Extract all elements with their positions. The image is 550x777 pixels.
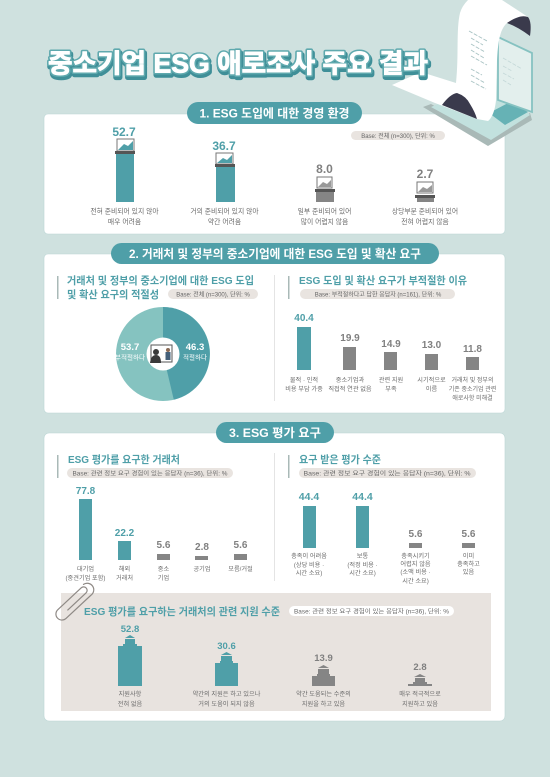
bar: 36.7: 약간 어려움 xyxy=(208,217,241,226)
bar chart: required level: 시간 소요) xyxy=(349,569,376,577)
bar: 13.9: 13.9 xyxy=(314,653,333,664)
bar chart: reasons: 40.4 xyxy=(294,313,314,324)
base note: support level xyxy=(289,606,454,616)
bar chart: requesting partners xyxy=(66,486,253,582)
bar: 30.6: 30.6 xyxy=(217,641,236,652)
bar chart: required level: 보통 xyxy=(357,553,368,560)
icon: paperclip xyxy=(53,581,96,623)
panel: support level xyxy=(53,581,491,711)
panel: section 3 ESG assessment demand xyxy=(44,422,505,721)
bar chart: reasons: 물적 · 인적 xyxy=(290,377,318,384)
bar: 36.7 xyxy=(190,139,259,226)
bar: 8.0: 8.0 xyxy=(316,162,333,176)
heading pill: section 1 xyxy=(187,102,362,124)
title: 중소기업 ESG 애로조사 주요 결과 xyxy=(48,48,428,78)
bar chart: required level: (상당 비용 · xyxy=(294,561,324,569)
bar chart: requesting partners: 거래처 xyxy=(116,574,133,582)
bar: 30.6: 거의 도움이 되지 않음 xyxy=(198,700,255,708)
base note: support level: Base: 관련 정보 요구 경험이 있는 응답자 (n=36), 단위: % xyxy=(294,608,450,616)
sub-heading: reasons: Base: 부적절하다고 답한 응답자 (n=161), 단위: % xyxy=(315,290,442,298)
bar: 2.8: 매우 적극적으로 xyxy=(399,690,441,698)
bar: 52.8: 지원사항 xyxy=(119,690,142,698)
bar chart: requesting partners: (중견기업 포함) xyxy=(66,574,106,582)
donut chart: 46.3 xyxy=(186,342,204,353)
bar chart: required level: 44.4 xyxy=(352,491,373,503)
sub-heading: required level xyxy=(288,453,476,478)
bar chart: reasons: 14.9 xyxy=(381,339,401,350)
bar: 2.7: 2.7 xyxy=(417,167,434,181)
sub-heading: appropriateness xyxy=(57,274,254,301)
bar: 52.7: 52.7 xyxy=(112,125,136,139)
bar chart: required level: 충족이 어려움 xyxy=(291,552,327,560)
bar: 13.9: 지원을 하고 있음 xyxy=(302,700,345,708)
bar: 30.6 xyxy=(193,641,261,708)
bar chart: reasons: 19.9 xyxy=(340,333,360,344)
bar chart: required level: 5.6 xyxy=(409,529,423,540)
bar: 52.8 xyxy=(118,624,143,708)
bar chart: requesting partners: 기업 xyxy=(158,574,169,582)
bar chart: reasons: 직접적 연관 없음 xyxy=(328,385,372,393)
bar chart: reasons: 중소기업과 xyxy=(336,376,365,384)
bar chart: reasons: 관련 지원 xyxy=(379,376,404,384)
bar chart: requesting partners: 5.6 xyxy=(157,540,171,551)
sub-heading: appropriateness: 거래처 및 정부의 중소기업에 대한 ESG 도입 xyxy=(67,274,254,287)
bar chart: required level: 있음 xyxy=(463,568,474,576)
base note: section 1 xyxy=(351,131,445,140)
heading pill: section 3 xyxy=(216,422,334,443)
sub-heading: support level: ESG 평가를 요구하는 거래처의 관련 지원 수준 xyxy=(84,605,280,618)
bar: 2.8: 2.8 xyxy=(413,662,427,673)
bar: 2.7 xyxy=(392,167,458,226)
heading pill: section 2: 2. 거래처 및 정부의 중소기업에 대한 ESG 도입 및 확산 요구 xyxy=(129,246,421,261)
sub-heading: requesting partners: Base: 관련 정보 요구 경험이 있는 응답자 (n=36), 단위: % xyxy=(72,470,228,478)
bar chart: reasons: 시기적으로 xyxy=(417,376,446,384)
panel: section 2 demand for ESG xyxy=(44,243,505,413)
bar chart: requesting partners: 대기업 xyxy=(77,565,94,573)
bar chart: required level: 44.4 xyxy=(299,491,319,503)
bar chart: reasons: 기존 중소기업 관련 xyxy=(449,385,496,393)
bar chart: required level: 5.6 xyxy=(462,529,476,540)
title: 중소기업 ESG 애로조사 주요 결과 xyxy=(49,51,429,81)
heading pill: section 1: 1. ESG 도입에 대한 경영 환경 xyxy=(200,106,350,120)
bar chart: required level: 충족하고 xyxy=(457,560,480,568)
bar chart: required level: (적정 비용 · xyxy=(347,561,378,569)
sub-heading: appropriateness: 및 확산 요구의 적절성 xyxy=(67,288,159,301)
bar chart: requesting partners: 2.8 xyxy=(195,542,209,553)
bar: 13.9 xyxy=(296,653,351,708)
bar chart: required level: 이미 xyxy=(463,552,474,560)
donut chart xyxy=(115,307,210,401)
bar chart: requesting partners: 중소 xyxy=(158,566,169,573)
bar chart: reasons: 비용 부담 가중 xyxy=(285,385,323,393)
base note: donut xyxy=(168,289,258,299)
base note: section 1: Base: 전체 (n=300), 단위: % xyxy=(361,132,435,140)
bar chart: reasons: 애로사항 미해결 xyxy=(452,394,493,402)
bar chart: required level: (소액 비용 · xyxy=(400,568,431,576)
sub-heading: requesting partners: ESG 평가를 요구한 거래처 xyxy=(68,453,180,466)
bar: 52.7: 전혀 준비되어 있지 않아 xyxy=(90,206,159,216)
bar: 8.0: 많이 어렵지 않음 xyxy=(301,217,348,226)
bar chart: required level: 시간 소요) xyxy=(402,577,429,585)
illustration: laptop with paper receipt xyxy=(392,0,532,146)
donut chart: 적절하다 xyxy=(183,352,207,362)
bar: 2.7: 전혀 어렵지 않음 xyxy=(401,217,449,226)
bar chart: reasons: 거래처 및 정부의 xyxy=(452,376,493,384)
sub-heading: requesting partners xyxy=(57,453,233,478)
bar: 2.7: 상당부분 준비되어 있어 xyxy=(392,206,458,216)
bar: 52.7 xyxy=(90,125,159,226)
bar: 2.8 xyxy=(399,662,441,708)
bar chart: reasons: 이름 xyxy=(426,385,437,393)
bar: 52.8: 52.8 xyxy=(121,624,139,635)
bar chart: reasons xyxy=(285,313,496,402)
donut chart: 부적절하다 xyxy=(115,352,145,362)
panel: section 1 business environment xyxy=(44,0,532,234)
bar chart: required level: 어렵지 않음 xyxy=(400,560,431,568)
bar chart: required level: 충족시키기 xyxy=(401,552,430,560)
bar chart: requesting partners: 공기업 xyxy=(193,565,211,573)
bar chart: required level xyxy=(291,491,480,585)
heading pill: section 2 xyxy=(111,243,439,264)
bar: 30.6: 약간의 지원은 하고 있으나 xyxy=(193,690,261,698)
bar: 8.0 xyxy=(298,162,351,226)
title: 중소기업 ESG 애로조사 주요 결과 xyxy=(48,48,428,78)
bar chart: requesting partners: 5.6 xyxy=(234,540,248,551)
donut chart: 53.7 xyxy=(121,342,139,353)
bar: 8.0: 일부 준비되어 있어 xyxy=(298,206,351,216)
bar: 13.9: 약간 도움되는 수준의 xyxy=(296,690,351,698)
bar chart: reasons: 13.0 xyxy=(422,340,442,351)
bar: 2.8: 지원하고 있음 xyxy=(402,700,438,708)
bar chart: requesting partners: 해외 xyxy=(119,565,130,573)
sub-heading: reasons xyxy=(288,274,467,299)
bar: 36.7: 36.7 xyxy=(212,139,236,153)
sub-heading: reasons: ESG 도입 및 확산 요구가 부적절한 이유 xyxy=(299,274,467,287)
heading pill: section 3: 3. ESG 평가 요구 xyxy=(229,425,321,440)
bar chart: required level: 시간 소요) xyxy=(296,569,322,577)
bar: 52.8: 전혀 없음 xyxy=(118,700,143,708)
bar: 36.7: 거의 준비되어 있지 않아 xyxy=(190,206,259,216)
bar: 52.7: 매우 어려움 xyxy=(108,217,141,226)
bar chart: requesting partners: 22.2 xyxy=(115,528,135,539)
base note: donut: Base: 전체 (n=300), 단위: % xyxy=(176,290,250,298)
bar chart: reasons: 11.8 xyxy=(463,344,482,355)
sub-heading: required level: Base: 관련 정보 요구 경험이 있는 응답자 (n=36), 단위: % xyxy=(304,470,471,478)
bar chart: requesting partners: 모름/거절 xyxy=(228,565,253,573)
bar chart: requesting partners: 77.8 xyxy=(76,486,96,497)
sub-heading: required level: 요구 받은 평가 수준 xyxy=(299,453,381,466)
bar chart: reasons: 부족 xyxy=(385,386,397,393)
